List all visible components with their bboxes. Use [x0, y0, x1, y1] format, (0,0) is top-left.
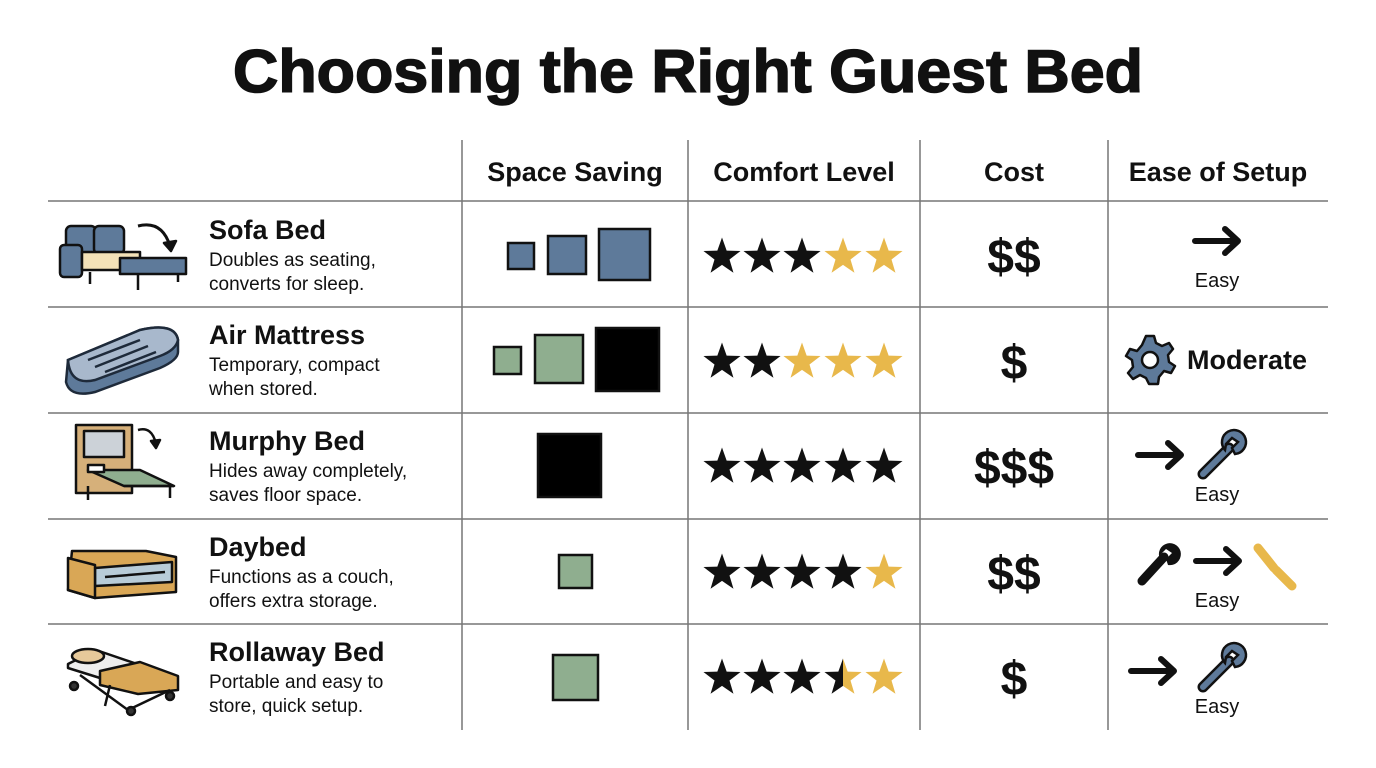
column headers	[487, 157, 1307, 187]
row: murphy bed: Hides away completely,	[209, 461, 407, 482]
table grid	[48, 140, 1328, 730]
row: murphy bed: Murphy Bed	[209, 426, 365, 456]
column headers: Space Saving	[487, 157, 663, 187]
cost: $$	[987, 548, 1041, 601]
cost	[974, 231, 1054, 706]
row: air mattress: Air Mattress	[209, 320, 365, 350]
row: daybed	[209, 532, 394, 612]
column headers: Comfort Level	[713, 157, 895, 187]
rollaway: easy	[1131, 643, 1246, 718]
row: murphy bed	[209, 426, 407, 506]
air: moderate	[1126, 336, 1307, 384]
cost: $$	[987, 231, 1041, 284]
row: air mattress	[208, 320, 380, 400]
row: rollaway bed	[209, 637, 385, 717]
row: daybed: Daybed	[209, 532, 307, 562]
row: rollaway bed: Rollaway Bed	[209, 637, 385, 667]
row: sofa bed: converts for sleep.	[209, 274, 364, 295]
column headers: Ease of Setup	[1129, 157, 1307, 187]
row: air mattress: when stored.	[208, 379, 318, 400]
comfort stars	[703, 238, 903, 694]
row: rollaway bed: store, quick setup.	[209, 696, 363, 717]
row: rollaway bed: Portable and easy to	[209, 672, 383, 693]
icon: air mattress	[66, 328, 178, 394]
row: sofa bed: Sofa Bed	[209, 215, 326, 245]
ease of setup	[1126, 229, 1307, 718]
row: sofa bed	[209, 215, 376, 295]
murphy: easy	[1138, 430, 1246, 506]
row: murphy bed: saves floor space.	[209, 485, 362, 506]
row: daybed: Functions as a couch,	[209, 567, 394, 588]
daybed: easy	[1142, 543, 1292, 612]
air: moderate: Moderate	[1187, 345, 1307, 375]
column headers: Cost	[984, 157, 1044, 187]
cost: $$$	[974, 442, 1054, 495]
row: air mattress: Temporary, compact	[209, 355, 380, 376]
sofa: easy	[1195, 229, 1239, 292]
icon: murphy bed	[76, 425, 174, 500]
icon: sofa bed	[60, 225, 186, 290]
row: daybed: offers extra storage.	[209, 591, 378, 612]
cost: $	[1001, 337, 1028, 390]
icon: rollaway bed	[68, 649, 178, 715]
rollaway: easy: Easy	[1195, 696, 1239, 718]
row: sofa bed: Doubles as seating,	[209, 250, 376, 271]
row labels	[208, 215, 407, 717]
daybed: easy: Easy	[1195, 590, 1239, 612]
murphy: easy: Easy	[1195, 484, 1239, 506]
cost: $	[1001, 653, 1028, 706]
icon: daybed	[68, 551, 176, 598]
sofa: easy: Easy	[1195, 270, 1239, 292]
title: Choosing the Right Guest Bed	[233, 38, 1143, 105]
space saving squares	[494, 229, 659, 700]
